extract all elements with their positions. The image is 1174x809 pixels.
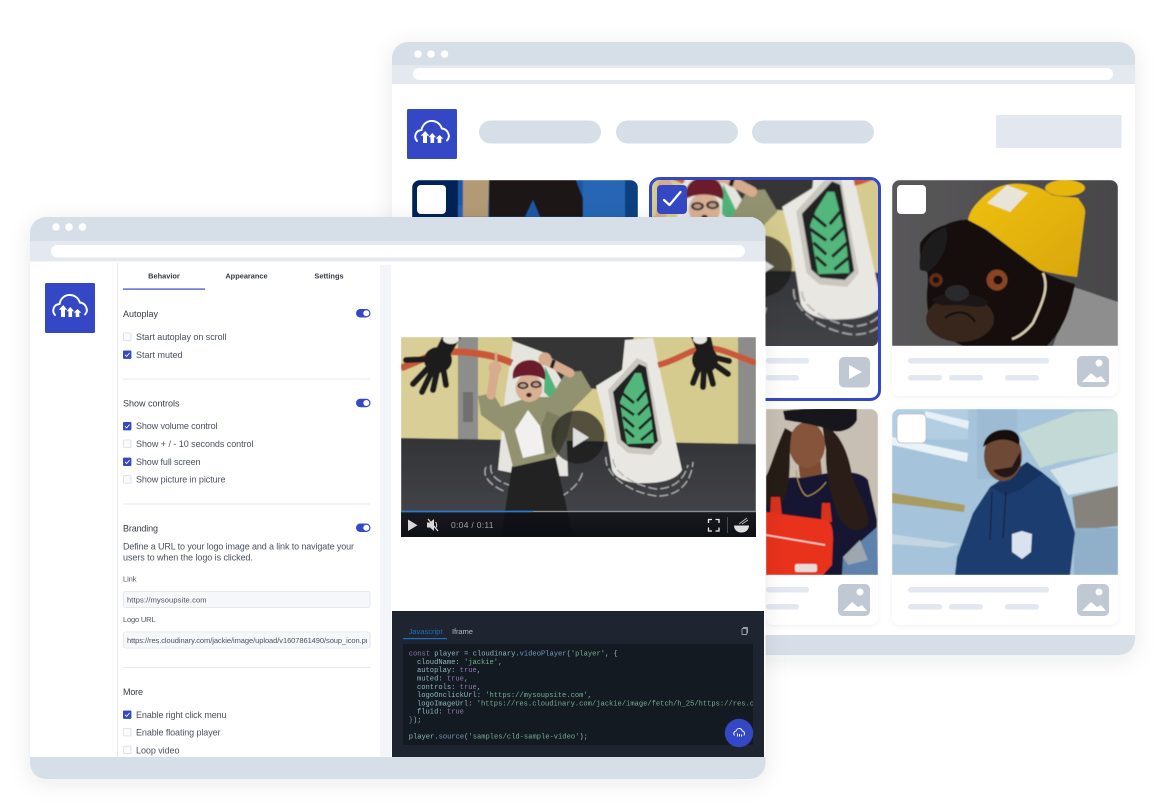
footer bar — [392, 635, 1135, 655]
section: branding: Define a URL to your logo image and a link to navigate your — [123, 542, 354, 552]
panel: settings — [123, 272, 374, 755]
checkbox — [897, 414, 926, 443]
icon: cloudinary logo — [407, 109, 457, 159]
code block: cloudName: 'jackie', — [417, 659, 502, 667]
panel: code snippet — [392, 611, 764, 757]
section: branding: https://res.cloudinary.com/jackie/image/upload/v1607861490/soup_icon.png — [127, 636, 374, 645]
section: show controls: Show full screen — [136, 457, 200, 467]
section: show controls: Show controls — [123, 399, 180, 409]
tabs: Appearance — [225, 272, 268, 280]
section: branding: users to when the logo is clicked. — [123, 552, 253, 562]
section: autoplay: Autoplay — [123, 309, 158, 319]
section: branding: Branding — [123, 524, 158, 534]
code tabs — [403, 627, 473, 639]
code block: controls: true, — [417, 684, 481, 692]
background window: media library — [392, 42, 1135, 655]
icon: image type — [1077, 584, 1109, 616]
caption placeholders — [766, 587, 809, 610]
section: autoplay — [123, 309, 370, 360]
card: man in hoodie photo — [892, 409, 1118, 625]
code block: autoplay: true, — [417, 667, 481, 675]
icon: image type — [1077, 356, 1109, 387]
card: selected video — [649, 177, 881, 401]
section: more: Enable right click menu — [136, 710, 226, 720]
section: more: Enable floating player — [136, 728, 220, 738]
player control bar — [401, 511, 756, 537]
code block: fluid: true — [417, 709, 464, 717]
video frame — [401, 334, 756, 537]
code block: logoImageUrl: 'https://res.cloudinary.com/jackie/image/fetch/h_25/https://res.cloudinary.com' — [417, 700, 814, 708]
section: autoplay: Start autoplay on scroll — [136, 332, 226, 342]
navigation placeholders — [479, 120, 874, 144]
title bar — [392, 42, 1135, 84]
checkbox — [897, 185, 926, 214]
footer bar — [30, 757, 766, 779]
code block — [403, 644, 753, 745]
selected checkbox — [657, 185, 687, 214]
code block: logoOnclickUrl: 'https://mysoupsite.com', — [417, 692, 592, 700]
section: branding: Link — [123, 574, 137, 584]
card: blue photo — [412, 180, 638, 217]
tabs: Settings — [314, 272, 344, 280]
section: more: Loop video — [136, 745, 180, 755]
card: woman photo — [766, 408, 878, 625]
section: show controls: Show + / - 10 seconds control — [136, 439, 254, 449]
scroll gutter — [380, 265, 391, 757]
section: autoplay: Start muted — [136, 350, 182, 360]
icon: play — [408, 520, 418, 531]
video thumbnail — [652, 180, 878, 346]
tabs: Behavior — [148, 272, 180, 280]
time display: 0:04 / 0:11 — [451, 520, 494, 530]
icon: copy — [742, 628, 748, 634]
sidebar divider — [117, 263, 118, 757]
tabs — [123, 272, 344, 290]
code tabs: Iframe — [452, 627, 473, 636]
caption placeholders — [908, 358, 1049, 380]
code block: player.source('samples/cld-sample-video'); — [409, 734, 588, 742]
icon: muted — [427, 519, 438, 531]
caption placeholders — [908, 587, 1049, 610]
section: branding — [123, 524, 374, 648]
video player — [401, 334, 756, 537]
card: pug photo — [892, 180, 1118, 396]
icon: image type — [838, 584, 870, 616]
icon: cloudinary logo — [45, 283, 95, 333]
section: show controls — [123, 399, 370, 485]
button placeholder — [996, 115, 1122, 148]
code block: const player = cloudinary.videoPlayer('player', { — [409, 651, 618, 659]
section: show controls: Show picture in picture — [136, 475, 226, 485]
section: branding: Logo URL — [123, 615, 156, 624]
section: branding: https://mysoupsite.com — [127, 595, 206, 604]
icon: video type — [839, 357, 870, 388]
section: more — [123, 687, 226, 755]
window frame — [30, 217, 766, 779]
caption placeholders — [766, 358, 809, 380]
title bar — [30, 217, 766, 262]
icon: fullscreen — [708, 520, 719, 531]
foreground window: video player studio — [30, 217, 814, 779]
section: more: More — [123, 687, 143, 697]
code block: }); — [409, 717, 422, 725]
icon: soup bowl logo — [734, 518, 749, 532]
code block: muted: true, — [417, 676, 468, 684]
icon: floating cloud button — [725, 719, 753, 747]
window frame — [392, 42, 1135, 655]
section: show controls: Show volume control — [136, 421, 218, 431]
code tabs: Javascript — [408, 627, 443, 636]
